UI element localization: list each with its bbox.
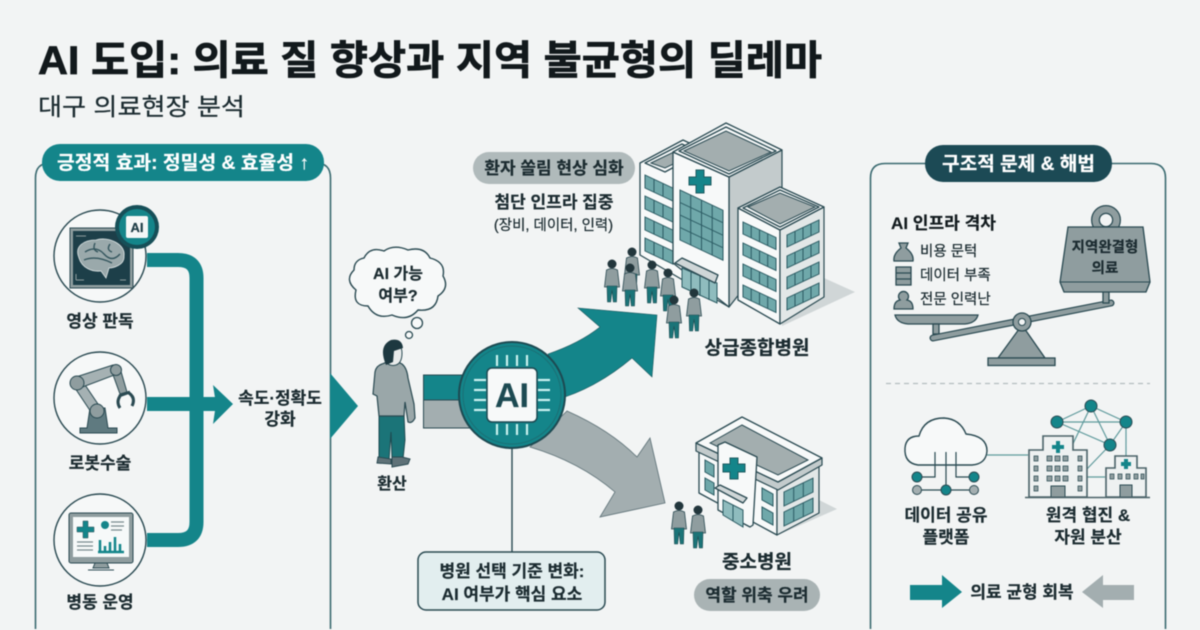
- pill: role shrink: [694, 579, 820, 611]
- label: remote care: 자원 분산: [1054, 528, 1122, 547]
- label: 영상 판독: [66, 312, 134, 331]
- panel: structural problems: [870, 145, 1166, 629]
- panel heading pill: 긍정적 효과: 정밀성 & 효율성 ↑: [57, 152, 309, 174]
- panel: positive effects: [36, 144, 330, 629]
- icon: ward monitor: [54, 494, 146, 586]
- callout: hospital choice: [418, 552, 605, 610]
- result text: [238, 389, 322, 429]
- scale illustration: [895, 210, 1150, 366]
- large hospital: [640, 123, 855, 326]
- label: 병동 운영: [66, 593, 134, 612]
- crowd at large hospital: [604, 248, 702, 338]
- title: AI 도입: 의료 질 향상과 지역 불균형의 딜레마: [38, 39, 822, 83]
- right wing: [738, 187, 824, 324]
- icon: database: [896, 267, 911, 285]
- arrow: teal right: [910, 575, 962, 608]
- text: balance recovery: 의료 균형 회복: [970, 583, 1074, 602]
- result text: 속도·정확도: [238, 389, 322, 408]
- weight: regional care: [1060, 210, 1150, 292]
- merging arrows: [147, 260, 233, 540]
- subtitle: 대구 의료현장 분석: [38, 94, 245, 121]
- arrow: to small hospital: [530, 411, 665, 517]
- label: data sharing: 데이터 공유: [905, 506, 987, 525]
- label: 환산: [377, 475, 407, 493]
- thought bubble: [349, 247, 446, 338]
- result text: 강화: [264, 410, 296, 429]
- label: 중소병원: [722, 551, 792, 573]
- icon: robot arm: [54, 352, 146, 444]
- callout: hospital choice: 병원 선택 기준 변화:: [440, 562, 584, 581]
- icon: person: [894, 291, 913, 309]
- panel heading pill: 구조적 문제 & 해법: [942, 153, 1095, 175]
- AI chip: [459, 342, 565, 448]
- thought bubble: 여부?: [378, 287, 418, 305]
- input band: [424, 375, 474, 428]
- label: data sharing: [905, 506, 987, 547]
- label: remote care: 원격 협진 &: [1046, 506, 1130, 525]
- network of hospitals: [987, 400, 1150, 498]
- icon: cloud data platform: [905, 418, 987, 495]
- arrow: to tertiary hospital: [548, 308, 657, 397]
- central tower: [673, 123, 782, 307]
- text: advanced infrastructure: 첨단 인프라 집중: [495, 193, 613, 212]
- patient figure: [373, 340, 415, 467]
- icon: brain scan: [54, 205, 159, 302]
- connector line: [511, 448, 513, 552]
- list: gap items: 비용 문턱: [920, 243, 977, 260]
- list: gap items: 전문 인력난: [920, 291, 991, 308]
- patients at small hospital: [672, 502, 706, 548]
- label: 로봇수술: [69, 454, 131, 473]
- arrow: gray left: [1082, 575, 1134, 608]
- pill: patient concentration: [473, 152, 635, 184]
- panel heading pill: [925, 145, 1112, 182]
- list: gap items: 데이터 부족: [920, 267, 991, 284]
- icon: AI chip badge: AI: [130, 220, 144, 235]
- callout: hospital choice: AI 여부가 핵심 요소: [442, 585, 582, 604]
- label: remote care: [1046, 506, 1130, 547]
- divider: [886, 382, 1150, 384]
- arrow: left panel to patient: [330, 373, 358, 439]
- small hospital: [696, 417, 837, 535]
- text: advanced infrastructure: [494, 193, 613, 234]
- label: data sharing: 플랫폼: [923, 528, 969, 547]
- heading: infrastructure gap: AI 인프라 격차: [891, 214, 996, 233]
- panel heading pill: [42, 144, 324, 181]
- icon: money bag: [894, 243, 913, 261]
- pill: role shrink: 역할 위축 우려: [705, 586, 809, 605]
- list: gap items: [894, 243, 991, 309]
- AI chip: AI: [495, 377, 529, 415]
- pill: patient concentration: 환자 쏠림 현상 심화: [484, 159, 624, 178]
- text: advanced infrastructure: (장비, 데이터, 인력): [494, 217, 613, 234]
- label: 상급종합병원: [705, 337, 809, 359]
- thought bubble: AI 가능: [373, 265, 423, 283]
- left wing: [640, 140, 729, 307]
- weight: regional care: 의료: [1092, 260, 1118, 277]
- weight: regional care: 지역완결형: [1072, 239, 1138, 256]
